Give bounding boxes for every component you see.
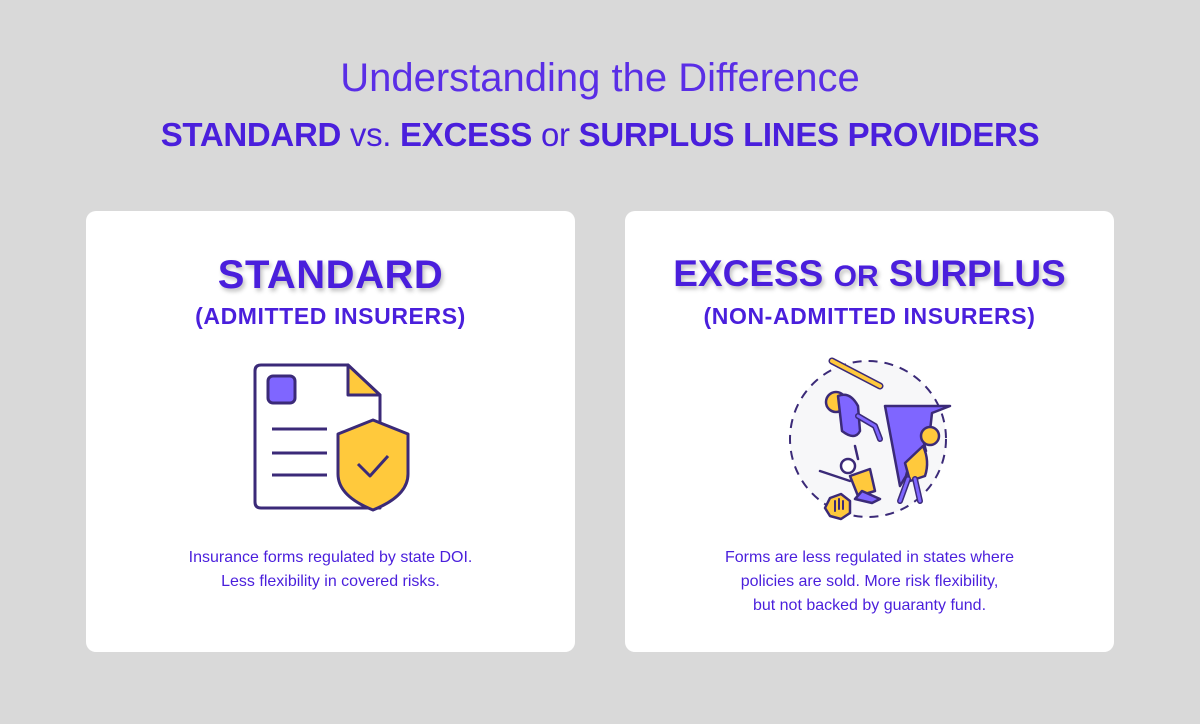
panel: excess bbox=[625, 211, 1114, 652]
text: excess description: but not backed by guaranty fund. bbox=[753, 597, 986, 614]
icon: document with shield bbox=[254, 363, 410, 512]
title: Understanding the Difference bbox=[340, 56, 860, 100]
heading: standard: STANDARD bbox=[218, 253, 443, 297]
subtitle: STANDARD vs. EXCESS or SURPLUS LINES PROVIDERS bbox=[161, 116, 1039, 153]
text: standard description: Less flexibility in covered risks. bbox=[221, 573, 440, 590]
text: standard description bbox=[189, 549, 472, 590]
icon: climbers bbox=[789, 358, 952, 520]
heading: excess or surplus: EXCESS OR SURPLUS bbox=[673, 253, 1066, 294]
subheading: admitted: (ADMITTED INSURERS) bbox=[195, 303, 466, 329]
text: standard description: Insurance forms regulated by state DOI. bbox=[189, 549, 472, 566]
subheading: non-admitted: (NON-ADMITTED INSURERS) bbox=[704, 303, 1035, 329]
text: excess description: policies are sold. More risk flexibility, bbox=[741, 573, 998, 590]
panel: standard bbox=[86, 211, 575, 652]
text: excess description: Forms are less regulated in states where bbox=[725, 549, 1014, 566]
text: excess description bbox=[725, 549, 1014, 614]
